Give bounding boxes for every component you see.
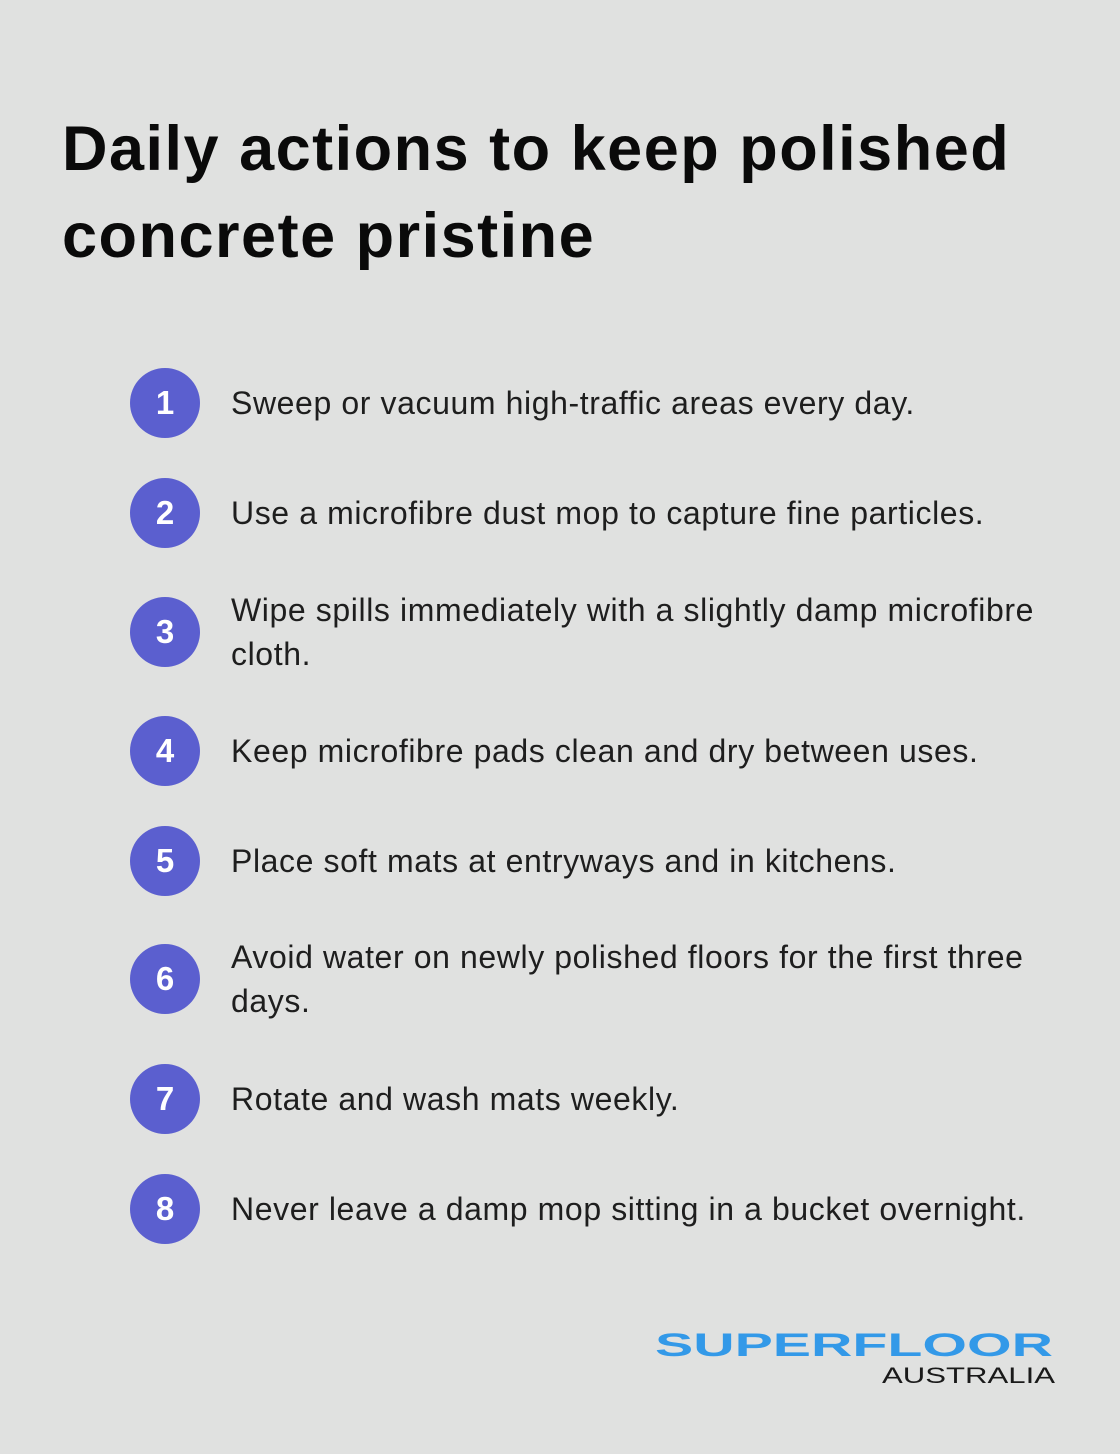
item 6: [130, 939, 1024, 1019]
item 4: Keep microfibre pads clean and dry between uses.: [231, 733, 978, 769]
item 7: Rotate and wash mats weekly.: [231, 1081, 679, 1117]
logo: AUSTRALIA: [882, 1363, 1055, 1388]
item 6: 6: [156, 960, 174, 997]
item 7: [130, 1064, 679, 1134]
item 2: 2: [156, 494, 174, 531]
item 4: 4: [156, 732, 174, 769]
title: concrete pristine: [62, 201, 595, 271]
item 2: Use a microfibre dust mop to capture fine particles.: [231, 495, 984, 531]
item 1: [130, 368, 915, 438]
item 1: 1: [156, 384, 174, 421]
logo: SUPERFLOOR: [655, 1327, 1053, 1363]
item 6: Avoid water on newly polished floors for the first three: [231, 939, 1024, 975]
item 8: [130, 1174, 1026, 1244]
title: [62, 114, 1010, 271]
title: Daily actions to keep polished: [62, 114, 1010, 184]
item 3: cloth.: [231, 636, 311, 672]
item 5: 5: [156, 842, 174, 879]
item 2: [130, 478, 984, 548]
item 8: Never leave a damp mop sitting in a bucket overnight.: [231, 1191, 1026, 1227]
item 3: Wipe spills immediately with a slightly damp microfibre: [231, 592, 1034, 628]
item 5: [130, 826, 897, 896]
item 1: Sweep or vacuum high-traffic areas every day.: [231, 385, 915, 421]
item 7: 7: [156, 1080, 174, 1117]
item 5: Place soft mats at entryways and in kitchens.: [231, 843, 897, 879]
item 8: 8: [156, 1190, 174, 1227]
item 3: 3: [156, 613, 174, 650]
item 3: [130, 592, 1034, 672]
item 4: [130, 716, 978, 786]
item 6: days.: [231, 983, 310, 1019]
logo: [655, 1327, 1055, 1388]
